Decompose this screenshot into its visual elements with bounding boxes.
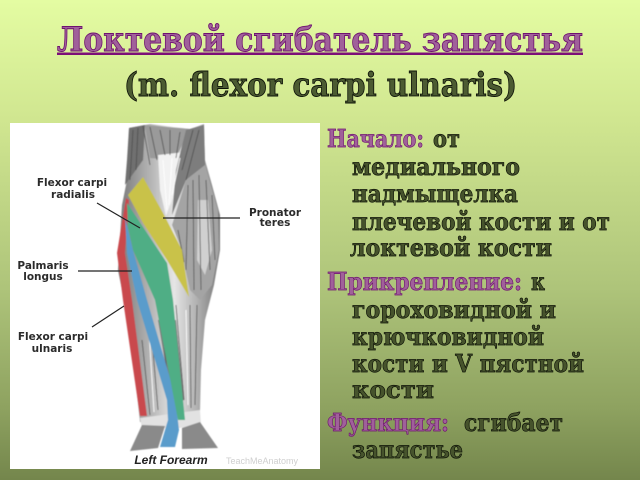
text block: origin: медиального [352,152,520,181]
label lines [78,203,240,327]
text block: function [327,408,563,464]
label: palmaris longus: longus [23,271,63,283]
lower tendon region [158,320,184,405]
text block: insertion: кости [352,375,434,404]
text block: insertion: кости и V пястной [352,349,584,378]
illustration: forearm muscles [117,124,220,451]
blue muscle: palmaris longus [125,217,179,447]
text block: insertion: гороховидной и [352,295,556,324]
text block: origin: надмыщелка [352,179,518,208]
subtitle: (m. flexor carpi ulnaris) [124,65,517,104]
title: Локтевой сгибатель запястья [57,20,583,60]
red muscle: flexor carpi ulnaris [117,198,147,416]
label: flexor carpi ulnaris: Flexor carpi [18,331,88,343]
yellow muscle: pronator teres [128,177,189,297]
forearm base [118,124,220,425]
muscle fibres [130,126,215,415]
green muscle: flexor carpi radialis [127,203,185,420]
label: pronator teres: teres [260,217,290,229]
label: flexor carpi ulnaris: ulnaris [32,343,72,355]
text block: insertion: Прикрепление: [327,267,522,296]
watermark: TeachMeAnatomy [226,456,299,466]
text block: origin [327,124,610,262]
text block: origin: плечевой кости и от [352,207,610,236]
label: flexor carpi radialis: radialis [51,189,95,201]
text block: function: Функция: [327,408,449,437]
text block: insertion [327,267,584,404]
anatomy image panel [10,123,320,469]
upper muscle shading [125,125,145,185]
text block: insertion: к [531,267,546,296]
text block: origin: Начало: [327,124,424,153]
text block: insertion: крючковидной [352,322,544,351]
label: pronator teres: Pronator [249,207,302,219]
caption: left forearm: Left Forearm [134,453,208,467]
text block: origin: от [433,124,460,153]
text block: function: запястье [352,435,463,464]
text block: function: сгибает [464,408,563,437]
hand base [130,425,165,451]
label: palmaris longus: Palmaris [17,260,69,272]
wrist band [140,410,201,428]
text block: origin: локтевой кости [350,233,552,262]
label: flexor carpi radialis: Flexor carpi [37,177,107,189]
